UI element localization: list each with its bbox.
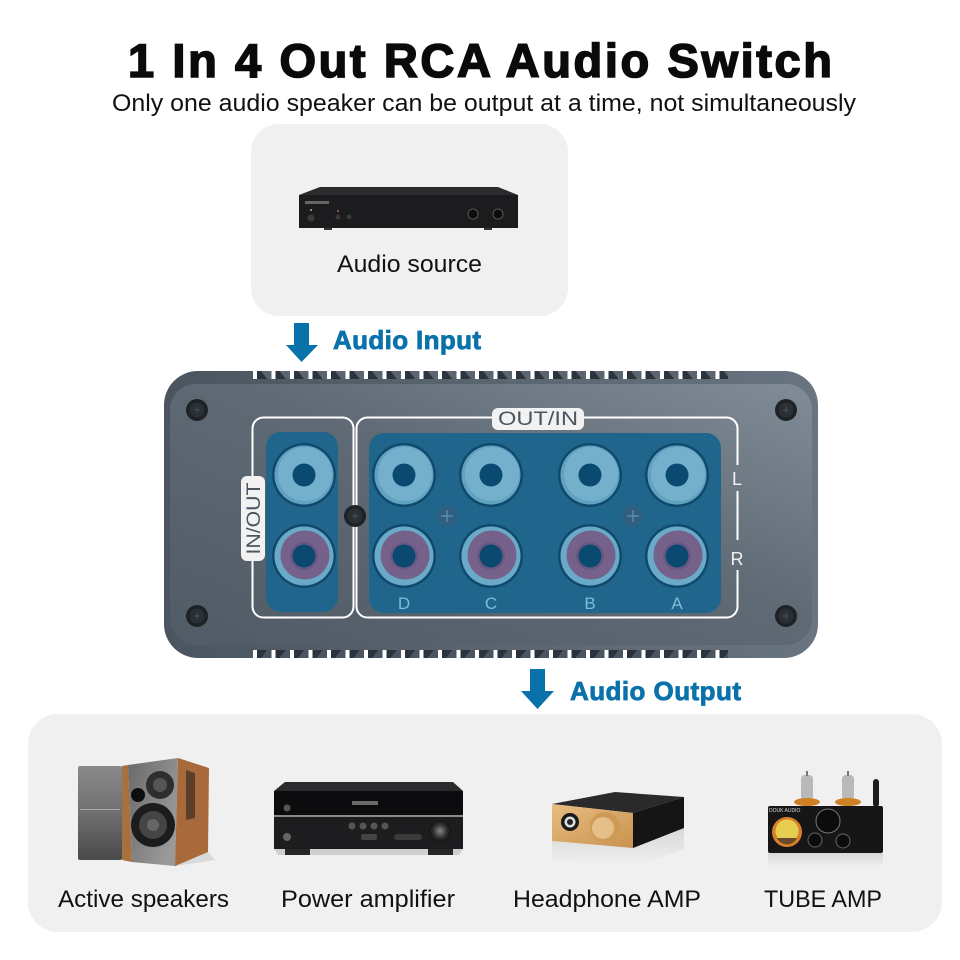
bracket: out/in xyxy=(356,418,738,618)
label: audio output: Audio Output xyxy=(570,676,741,706)
arrow: audio input xyxy=(286,323,318,362)
cooling fins xyxy=(253,371,728,658)
icon: active speakers xyxy=(78,758,215,866)
jack labels: C xyxy=(485,594,497,613)
icon: power amplifier xyxy=(274,782,463,855)
icon: headphone amp xyxy=(552,792,684,866)
label: OUT/IN: OUT/IN xyxy=(498,409,578,430)
label: power amplifier: Power amplifier xyxy=(281,886,455,913)
title: 1 In 4 Out RCA Audio Switch xyxy=(128,34,832,87)
panel: output jack area xyxy=(369,433,721,613)
label: audio source: Audio source xyxy=(337,251,482,278)
label: headphone amp: Headphone AMP xyxy=(513,886,701,913)
icon: tube amp xyxy=(768,771,883,867)
subtitle: Only one audio speaker can be output at a time, not simultaneously xyxy=(112,90,856,117)
panel: input jack area xyxy=(266,432,338,612)
label: R channel: R xyxy=(730,549,744,569)
jack labels: B xyxy=(584,594,596,613)
left channel jacks xyxy=(272,443,709,507)
icon: audio source amplifier xyxy=(299,187,518,230)
label: audio input: Audio Input xyxy=(333,325,481,355)
label: IN/OUT: IN/OUT xyxy=(244,482,265,554)
panel: output devices xyxy=(28,714,942,932)
label: OUT/IN xyxy=(492,408,584,430)
corner screws xyxy=(186,399,797,627)
label: IN/OUT xyxy=(241,476,265,561)
centre screw xyxy=(344,505,366,527)
label: tube amp: TUBE AMP xyxy=(764,886,882,913)
arrow: audio output xyxy=(521,669,554,709)
right channel jacks xyxy=(272,524,709,588)
bracket: in/out xyxy=(252,418,354,618)
panel screws xyxy=(436,506,644,526)
jack labels: D xyxy=(398,594,410,613)
panel: audio source xyxy=(251,124,568,316)
panel: RCA switch device xyxy=(164,371,818,658)
jack labels: A xyxy=(671,594,683,613)
jack labels xyxy=(398,594,683,613)
icon: tube amp: DOUK AUDIO xyxy=(769,808,801,814)
label: L channel: L xyxy=(732,469,742,489)
label: active speakers: Active speakers xyxy=(58,886,229,913)
